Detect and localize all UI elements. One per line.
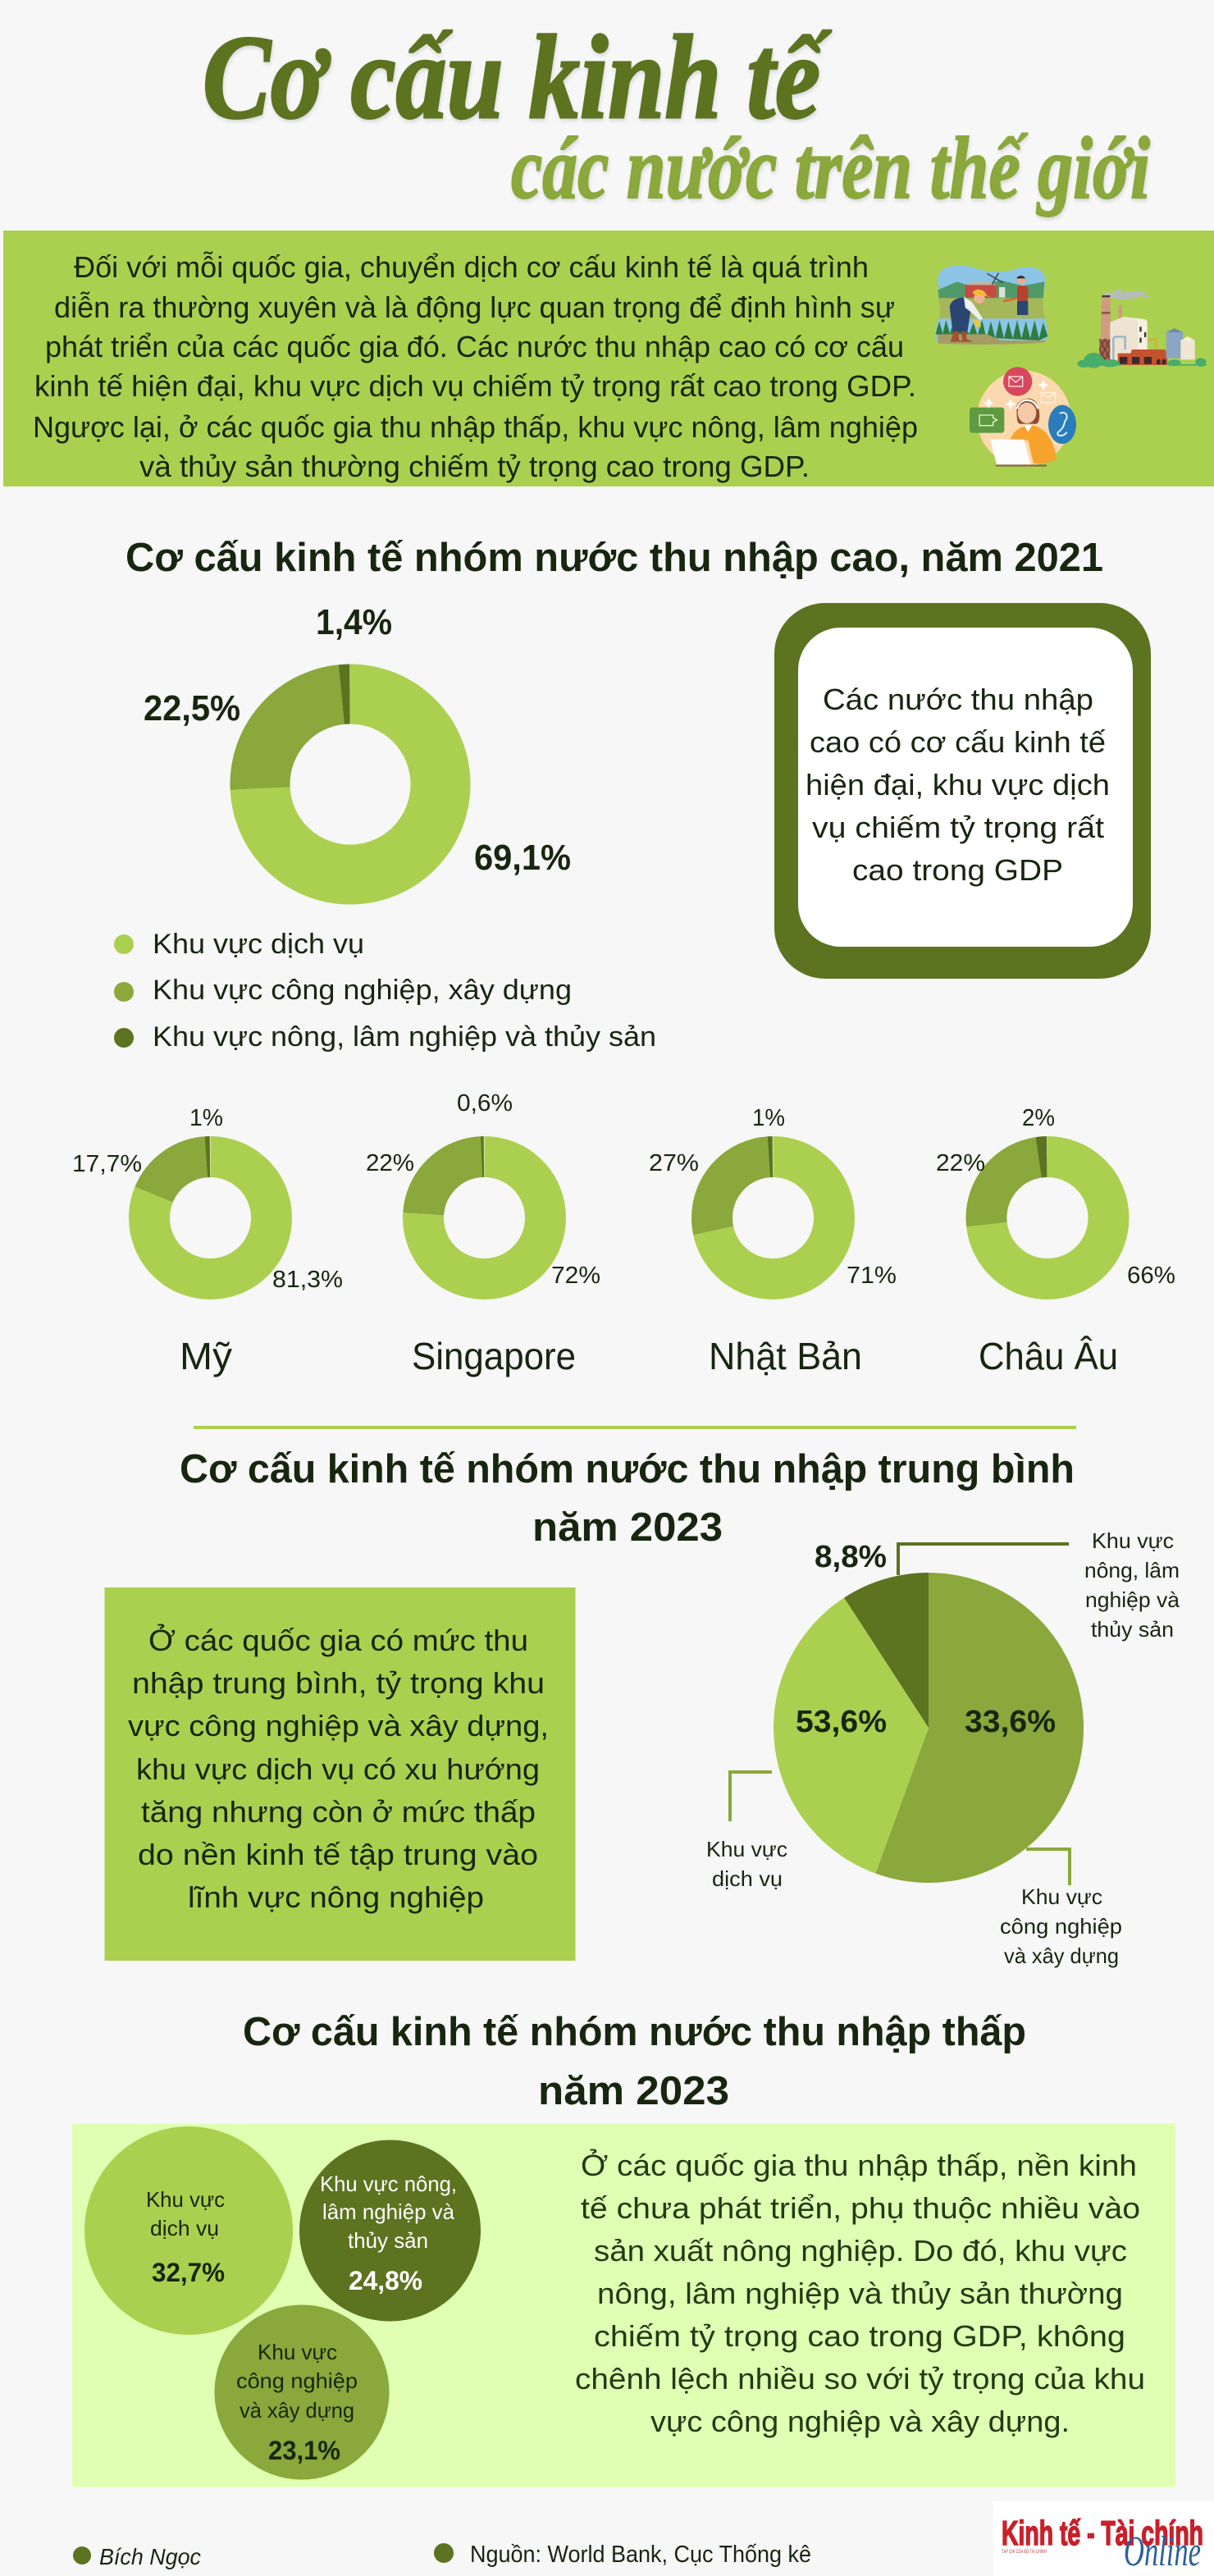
callout: high income: cao trong GDP (852, 853, 1063, 887)
low income text: sản xuất nông nghiệp. Do đó, khu vực (594, 2234, 1127, 2268)
label: industry: và xây dựng (1004, 1943, 1119, 1968)
panel: middle income text: do nền kinh tế tập trung vào (138, 1838, 538, 1871)
intro text: và thủy sản thường chiếm tỷ trọng cao trong GDP. (139, 450, 810, 483)
bubble: agriculture: 24,8% (349, 2266, 422, 2295)
callout: high income: Các nước thu nhập (823, 683, 1093, 716)
bubble: services: Khu vực (146, 2187, 225, 2212)
callout: high income: hiện đại, khu vực dịch (806, 768, 1110, 802)
legend: Khu vực công nghiệp, xây dựng (153, 975, 572, 1006)
low income text: chênh lệch nhiều so với tỷ trọng của khu (575, 2362, 1145, 2396)
donut: Nhật Bản: 71% (847, 1263, 897, 1289)
label: agriculture: nông, lâm (1084, 1558, 1180, 1583)
bubble: agriculture: Khu vực nông, (320, 2172, 457, 2196)
logo: TẠP CHÍ CỦA BỘ TÀI CHÍNH (1002, 2549, 1047, 2555)
donut: Nhật Bản: Nhật Bản (709, 1335, 862, 1377)
donut: Nhật Bản: 27% (649, 1150, 699, 1176)
donut: Mỹ: Mỹ (180, 1335, 232, 1377)
donut: Singapore: 0,6% (457, 1090, 513, 1117)
donut: Châu Âu (936, 1105, 1175, 1377)
author credit: Bích Ngọc (99, 2544, 201, 2569)
donut: Nhật Bản: 1% (752, 1105, 785, 1131)
bubble: services: 32,7% (152, 2258, 225, 2287)
donut: Singapore: Singapore (412, 1335, 576, 1377)
label: industry: công nghiệp (1000, 1914, 1122, 1939)
label: industry (1000, 1884, 1122, 1968)
callout: high income: cao có cơ cấu kinh tế (810, 725, 1106, 759)
intro text: phát triển của các quốc gia đó. Các nước thu nhập cao có cơ cấu (45, 330, 904, 363)
donut: Mỹ: 81,3% (272, 1267, 343, 1293)
donut: Châu Âu: 22% (936, 1150, 985, 1176)
callout: high income: vụ chiếm tỷ trọng rất (812, 811, 1104, 844)
panel: middle income text: lĩnh vực nông nghiệp (188, 1880, 484, 1914)
heading: low income (243, 2010, 1026, 2113)
panel: middle income text: nhập trung bình, tỷ trọng khu (132, 1666, 545, 1700)
donut chart: high income group (144, 602, 571, 878)
bubble: agriculture: thủy sản (348, 2228, 428, 2253)
legend: Khu vực dịch vụ (153, 929, 364, 960)
callout: high income (774, 603, 1151, 979)
panel: middle income text: Ở các quốc gia có mức thu (148, 1623, 528, 1657)
donut chart: high income group: 22,5% (144, 688, 240, 728)
intro text: Đối với mỗi quốc gia, chuyển dịch cơ cấu kinh tế là quá trình (74, 250, 869, 284)
low income text: nông, lâm nghiệp và thủy sản thường (597, 2277, 1123, 2310)
low income text: vực công nghiệp và xây dựng. (650, 2405, 1070, 2438)
panel: introduction (3, 231, 1214, 486)
donut: Mỹ (72, 1105, 343, 1377)
title (203, 11, 1150, 217)
bubble: agriculture: lâm nghiệp và (322, 2199, 455, 2224)
bubble: agriculture (299, 2140, 481, 2322)
label: agriculture (1084, 1528, 1180, 1642)
pie chart: middle income: 33,6% (965, 1705, 1056, 1739)
bubble: industry: Khu vực (258, 2340, 337, 2364)
donut: Singapore (366, 1090, 600, 1377)
pie chart: middle income: 8,8% (815, 1540, 887, 1574)
label: industry: Khu vực (1021, 1884, 1102, 1909)
intro text: Ngược lại, ở các quốc gia thu nhập thấp, khu vực nông, lâm nghiệp (33, 410, 918, 444)
bubble: services: dịch vụ (150, 2216, 219, 2240)
intro text (33, 250, 918, 483)
heading: middle income (180, 1447, 1075, 1550)
bubble: industry: 23,1% (268, 2436, 340, 2465)
low income text: chiếm tỷ trọng cao trong GDP, không (594, 2319, 1125, 2353)
legend (114, 929, 656, 1053)
heading: middle income: Cơ cấu kinh tế nhóm nước thu nhập trung bình (180, 1447, 1075, 1491)
donut: Singapore: 72% (551, 1263, 600, 1289)
leader line: agriculture (898, 1544, 1069, 1575)
donut: Singapore: 22% (366, 1150, 414, 1176)
label: agriculture: nghiệp và (1085, 1587, 1180, 1612)
bubble: industry: và xây dựng (240, 2398, 354, 2423)
donut: Mỹ: 17,7% (72, 1151, 142, 1177)
leader line: services (730, 1772, 772, 1821)
label: agriculture: Khu vực (1092, 1528, 1174, 1553)
panel: middle income text: tăng nhưng còn ở mức thấp (141, 1795, 536, 1829)
low income text: Ở các quốc gia thu nhập thấp, nền kinh (581, 2148, 1137, 2182)
icon: factory (1077, 290, 1207, 368)
low income text: tế chưa phát triển, phụ thuộc nhiều vào (581, 2191, 1140, 2225)
label: agriculture: thủy sản (1091, 1617, 1174, 1642)
bubble: services (84, 2126, 293, 2335)
legend: Khu vực nông, lâm nghiệp và thủy sản (153, 1021, 656, 1053)
pie chart: middle income (706, 1528, 1180, 1968)
source credit: Nguồn: World Bank, Cục Thống kê (470, 2542, 811, 2568)
panel: middle income text: khu vực dịch vụ có xu hướng (136, 1752, 540, 1786)
heading: middle income: năm 2023 (532, 1505, 723, 1550)
donut chart: high income group: 1,4% (316, 602, 392, 642)
heading: low income: năm 2023 (538, 2069, 729, 2113)
intro text: kinh tế hiện đại, khu vực dịch vụ chiếm tỷ trọng rất cao trong GDP. (34, 369, 916, 403)
heading: low income: Cơ cấu kinh tế nhóm nước thu nhập thấp (243, 2010, 1026, 2054)
heading: high income: Cơ cấu kinh tế nhóm nước thu nhập cao, năm 2021 (126, 536, 1103, 580)
title: Cơ cấu kinh tế (203, 11, 832, 144)
icon: customer service (970, 367, 1076, 467)
low income text (575, 2148, 1145, 2438)
bubble: industry (215, 2305, 389, 2479)
donut chart: high income group: 69,1% (474, 838, 571, 878)
donut: Mỹ: 1% (189, 1105, 223, 1131)
label: services (706, 1837, 787, 1891)
label: services: Khu vực (706, 1837, 787, 1861)
panel: middle income text: vực công nghiệp và xây dựng, (128, 1709, 549, 1742)
bubble: industry: công nghiệp (236, 2368, 358, 2393)
leader line: industry (1026, 1849, 1070, 1885)
donut: Châu Âu: Châu Âu (979, 1335, 1118, 1377)
donut: Nhật Bản (649, 1105, 897, 1377)
panel: middle income text (105, 1587, 576, 1961)
label: services: dịch vụ (712, 1866, 783, 1891)
panel: low income (72, 2123, 1175, 2487)
donut: Châu Âu: 66% (1127, 1263, 1175, 1289)
intro text: diễn ra thường xuyên và là động lực quan trọng để định hình sự (54, 290, 895, 324)
icon: farmers in field (935, 265, 1047, 345)
logo (993, 2501, 1214, 2576)
pie chart: middle income: 53,6% (796, 1705, 887, 1739)
donut: Châu Âu: 2% (1022, 1105, 1055, 1131)
